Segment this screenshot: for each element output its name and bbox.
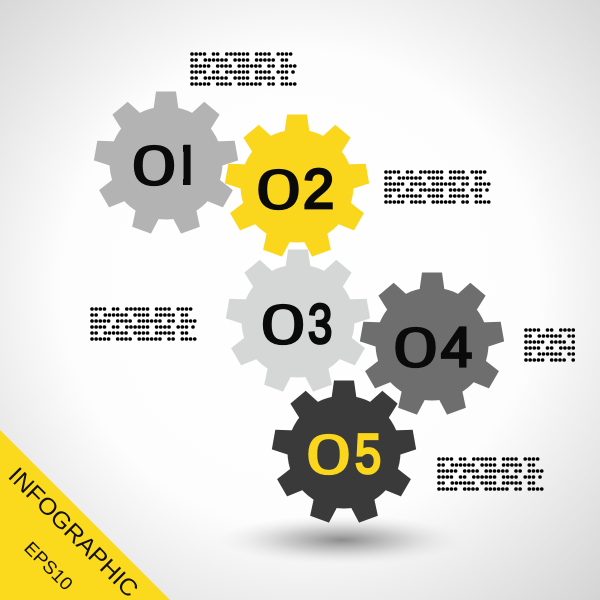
gear 01: 1 xyxy=(170,133,202,198)
ground shadow xyxy=(217,515,467,565)
gear 05: 0 xyxy=(306,423,351,486)
text block 02 xyxy=(386,172,489,202)
gear 03: 0 xyxy=(260,293,306,356)
banner subtitle: EPS10 xyxy=(20,538,77,594)
gear 02: 2 xyxy=(303,157,334,220)
gear 03 xyxy=(225,250,371,393)
gear 04 xyxy=(359,272,505,416)
text block 04 xyxy=(526,330,574,360)
text block 01 xyxy=(192,54,295,84)
gear 04: 0 xyxy=(393,316,438,379)
gear 01 xyxy=(93,92,239,235)
gear 02: 0 xyxy=(256,158,301,221)
yellow corner banner xyxy=(0,430,170,600)
text block 03 xyxy=(92,309,195,339)
text block 05 xyxy=(439,459,542,489)
gear 05: 5 xyxy=(355,422,381,485)
banner title: INFOGRAPHIC xyxy=(3,462,143,600)
gear 01: 0 xyxy=(131,134,177,197)
gear 03: 3 xyxy=(308,293,332,355)
gear 02 xyxy=(224,114,370,258)
gear 05 xyxy=(271,380,417,524)
gear 04: 4 xyxy=(441,315,472,378)
